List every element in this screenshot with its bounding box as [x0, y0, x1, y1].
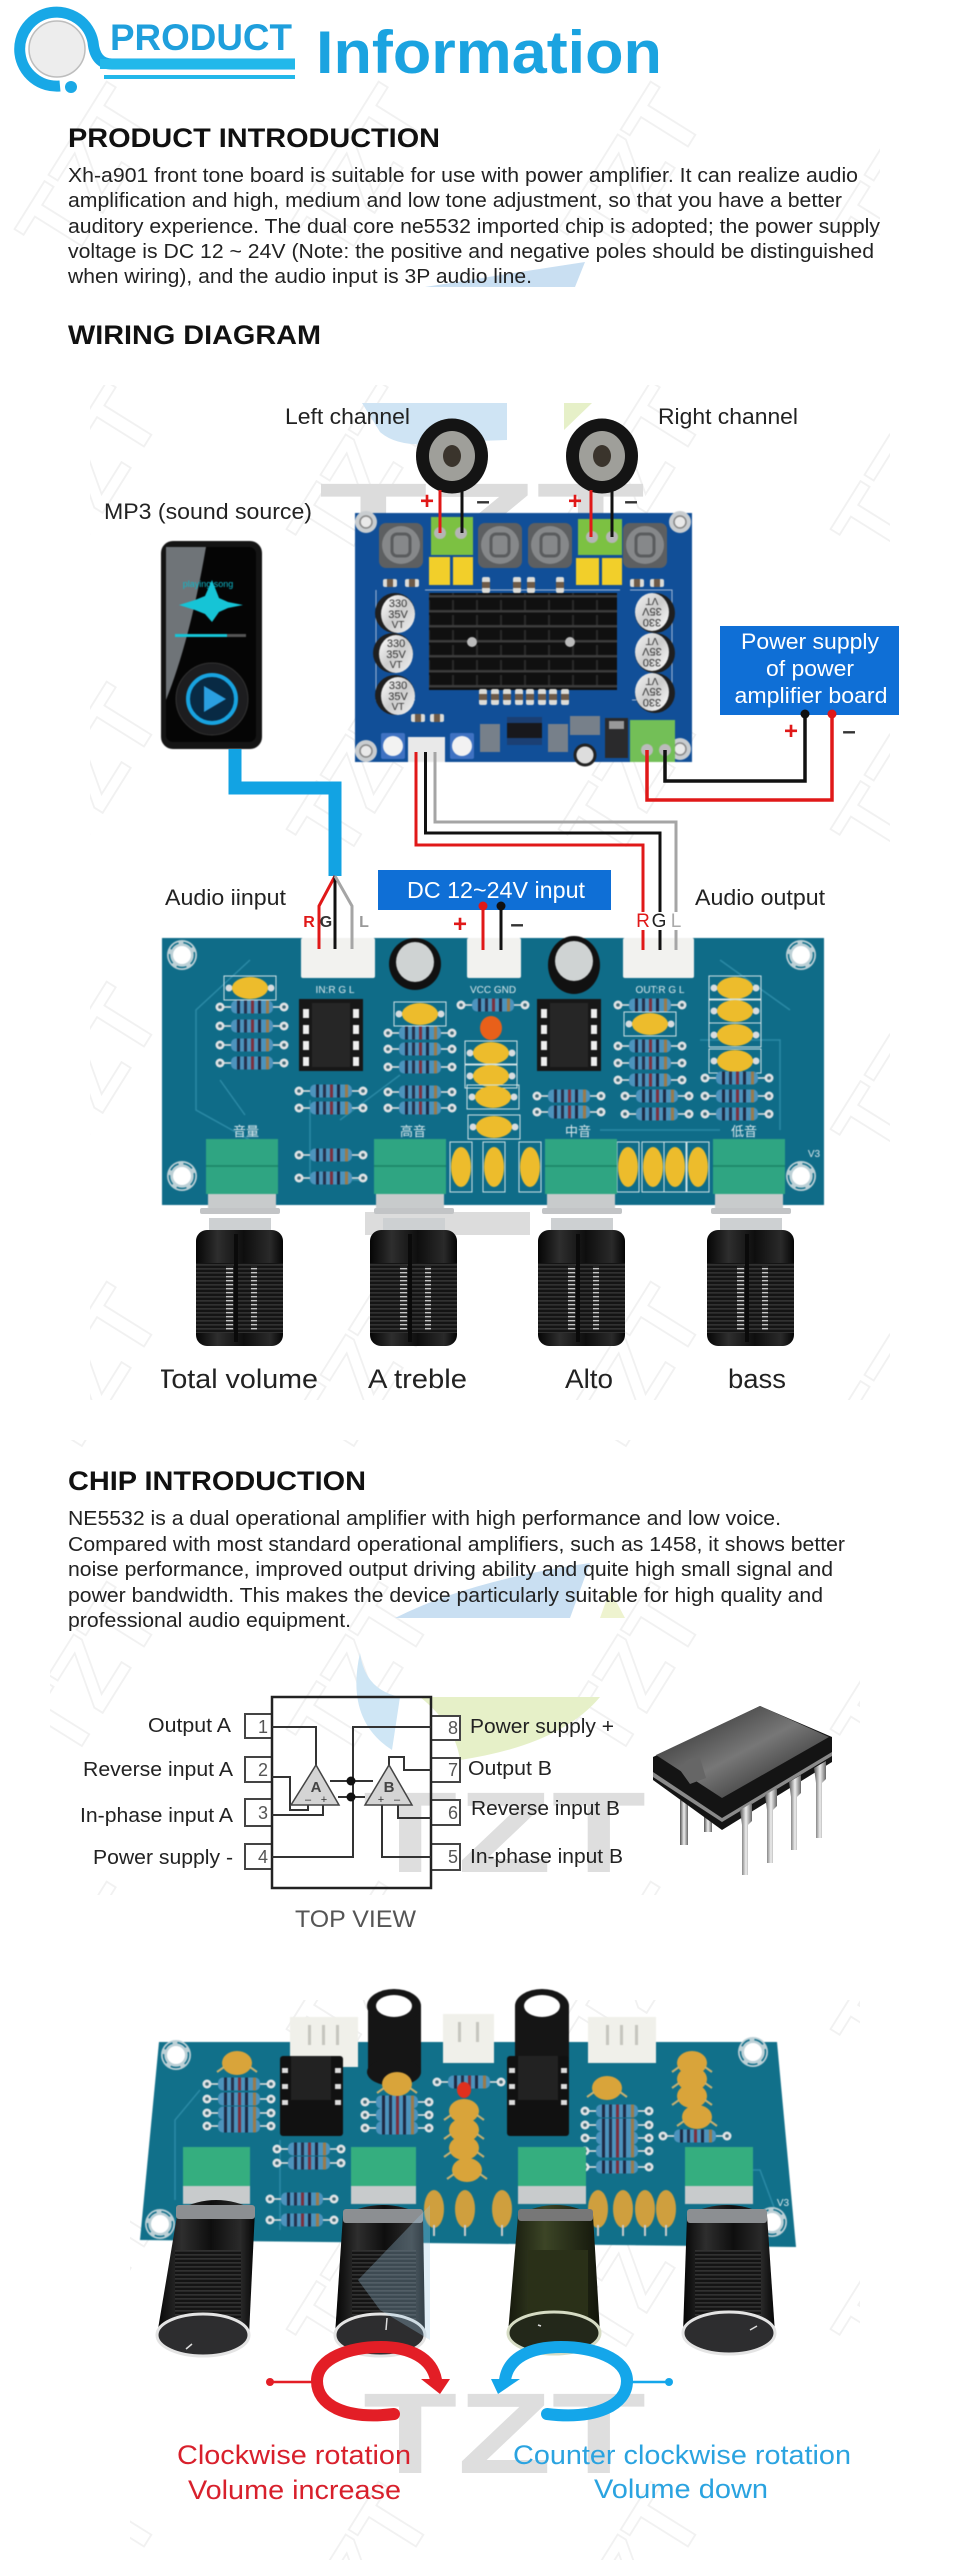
text block: chip introduction: Compared with most standard operational amplifiers, such as 1458, it shows better — [68, 1534, 845, 1556]
knob: alto — [538, 1208, 625, 1346]
large background logo watermarks: TZT — [319, 460, 645, 588]
rotating knob 2 — [335, 2205, 430, 2356]
right pin labels: In-phase input B — [470, 1846, 623, 1868]
op-amp A: – — [305, 1794, 312, 1806]
op-amp B: + — [378, 1794, 384, 1806]
tone board: 低音 — [731, 1124, 757, 1139]
op-amp A: A — [311, 1779, 322, 1796]
knob labels: Total volume — [157, 1364, 318, 1394]
knob labels: Alto — [565, 1364, 613, 1394]
tone board: V3 — [808, 1149, 821, 1160]
left pin labels — [80, 1715, 234, 1869]
large background logo watermarks — [319, 262, 646, 2498]
heading word: PRODUCT: PRODUCT — [110, 17, 292, 58]
electrolytic capacitors — [367, 1989, 569, 2086]
knob labels: A treble — [368, 1364, 467, 1394]
knob: bass — [707, 1208, 794, 1346]
icon: left speaker — [416, 418, 488, 494]
tone board: 中音 — [565, 1124, 591, 1139]
chip photo — [653, 1706, 832, 1875]
dc input box: DC 12~24V input — [407, 877, 586, 903]
arrow: clockwise — [266, 2347, 450, 2415]
op-amp A — [291, 1765, 339, 1806]
left pin labels: Output A — [148, 1715, 232, 1737]
tone board: 高音 — [400, 1124, 426, 1139]
arrow: counter clockwise — [491, 2347, 673, 2415]
caption: counter clockwise rotation — [513, 2440, 851, 2504]
power supply wires: – — [842, 718, 856, 745]
text block: chip introduction — [68, 1508, 845, 1632]
knob labels: bass — [728, 1364, 786, 1394]
pin numbers: 7 — [448, 1760, 458, 1780]
tone board photo: V3 — [777, 2198, 790, 2209]
label: right channel: Right channel — [658, 404, 798, 429]
tone board: VCC GND — [470, 985, 516, 996]
mp3 player — [161, 541, 262, 749]
power supply box: of power — [766, 656, 854, 681]
heading: chip introduction: CHIP INTRODUCTION — [68, 1466, 366, 1496]
output wires on tone board: R — [636, 911, 650, 932]
connectors — [290, 2014, 656, 2067]
right pin labels — [468, 1716, 623, 1868]
right pin labels: Output B — [468, 1758, 552, 1780]
caption: counter clockwise rotation: Counter clockwise rotation — [513, 2440, 851, 2470]
label: left channel: Left channel — [285, 404, 410, 429]
caption: counter clockwise rotation: Volume down — [594, 2474, 768, 2504]
input wires on tone board: R — [303, 914, 315, 931]
left pin labels: In-phase input A — [80, 1805, 234, 1827]
text block: product introduction: auditory experience. The dual core ne5532 imported chip is adopted; the power supply — [68, 216, 880, 238]
text block: product introduction: when wiring), and the audio input is 3P audio line. — [67, 266, 532, 288]
tone board: 音量 — [233, 1124, 259, 1139]
power supply wires — [647, 710, 856, 800]
pin numbers: 4 — [258, 1847, 268, 1867]
input wires on tone board: L — [359, 914, 369, 931]
tone board photo — [140, 1989, 796, 2247]
heading: product introduction: PRODUCT INTRODUCTION — [68, 123, 440, 153]
input wires on tone board — [303, 876, 369, 949]
knob: total volume — [196, 1208, 283, 1346]
rotating knob 3 — [508, 2205, 600, 2354]
header banner — [20, 12, 662, 93]
left pin labels: Power supply - — [93, 1847, 233, 1869]
text block: chip introduction: power bandwidth. This makes the device particularly suitable for high quality and — [68, 1585, 823, 1607]
output wires on tone board: L — [671, 911, 681, 932]
heading word: Information: Information — [316, 19, 662, 86]
chip outline — [272, 1697, 431, 1888]
mp3 player: playing song — [183, 579, 233, 589]
speaker wires and polarity: + — [568, 488, 582, 515]
internal wiring — [272, 1727, 431, 1857]
caption: clockwise rotation: Clockwise rotation — [177, 2440, 411, 2470]
op-amp A: + — [321, 1794, 327, 1806]
output wires on tone board: G — [652, 911, 666, 932]
caption: clockwise rotation — [177, 2440, 411, 2505]
icon: right speaker — [566, 418, 638, 494]
top view caption: TOP VIEW — [295, 1906, 416, 1933]
knob: treble — [370, 1208, 457, 1346]
knob labels — [161, 1368, 785, 1388]
label: audio input: Audio iinput — [165, 885, 286, 910]
pin boxes — [245, 1714, 460, 1870]
label: mp3 sound source: MP3 (sound source) — [104, 499, 312, 524]
rotating knob 4 — [683, 2205, 775, 2354]
power supply wires: + — [784, 718, 798, 745]
pin numbers: 3 — [258, 1803, 268, 1823]
op-amp sockets — [280, 2056, 569, 2136]
speaker wires and polarity: + — [420, 488, 434, 515]
large background logo watermarks: TZT — [363, 1769, 646, 1897]
pin numbers — [258, 1717, 458, 1867]
amplifier board — [355, 511, 692, 765]
op-amp B — [365, 1765, 412, 1806]
chip pinout diagram — [80, 1697, 623, 1933]
tone board — [162, 936, 824, 1210]
pin numbers: 2 — [258, 1760, 268, 1780]
text block: chip introduction: NE5532 is a dual operational amplifier with high performance and low voice. — [68, 1508, 781, 1530]
text block: product introduction: Xh-a901 front tone board is suitable for use with power amplifier. It can realize audio — [68, 165, 858, 187]
speaker wires and polarity: – — [476, 488, 490, 515]
speaker wires and polarity: – — [624, 488, 638, 515]
label: audio output: Audio output — [695, 885, 825, 910]
dc input wires: + — [453, 911, 467, 938]
text block: product introduction: voltage is DC 12 ~ 24V (Note: the positive and negative poles should be distinguished — [68, 241, 874, 263]
input wires on tone board: G — [320, 914, 332, 931]
pin numbers: 8 — [448, 1718, 458, 1738]
right pin labels: Power supply + — [470, 1716, 614, 1738]
output wires on tone board — [630, 911, 688, 950]
right pin labels: Reverse input B — [471, 1798, 620, 1820]
dc input wires — [453, 902, 524, 950]
text block: product introduction — [67, 165, 880, 288]
pin numbers: 6 — [448, 1803, 458, 1823]
icon: product ring — [20, 12, 295, 93]
power supply box: Power supply — [741, 629, 879, 654]
dc input box — [378, 870, 611, 910]
heading: wiring diagram: WIRING DIAGRAM — [68, 320, 321, 350]
text block: product introduction: amplification and high, medium and low tone adjustment, so that you have a better — [68, 190, 842, 212]
rotating knob 1 — [157, 2200, 255, 2356]
caption: clockwise rotation: Volume increase — [188, 2475, 401, 2505]
left pin labels: Reverse input A — [83, 1759, 234, 1781]
blue audio cable — [235, 749, 335, 876]
power supply box — [720, 626, 899, 715]
large background logo watermarks: TZT — [363, 2370, 646, 2498]
text block: chip introduction: noise performance, improved output driving ability and quite high small signal and — [68, 1559, 833, 1581]
op-amp B: – — [394, 1794, 401, 1806]
audio output wires — [416, 752, 676, 912]
dc input wires: – — [510, 911, 524, 938]
pin numbers: 1 — [258, 1717, 268, 1737]
tone board: IN:R G L — [316, 985, 355, 996]
speaker wires and polarity — [420, 488, 638, 537]
power supply box: amplifier board — [734, 683, 888, 708]
tone board: OUT:R G L — [636, 985, 685, 996]
pin numbers: 5 — [448, 1847, 458, 1867]
text block: chip introduction: professional audio equipment. — [68, 1610, 351, 1632]
op-amp B: B — [384, 1779, 395, 1796]
